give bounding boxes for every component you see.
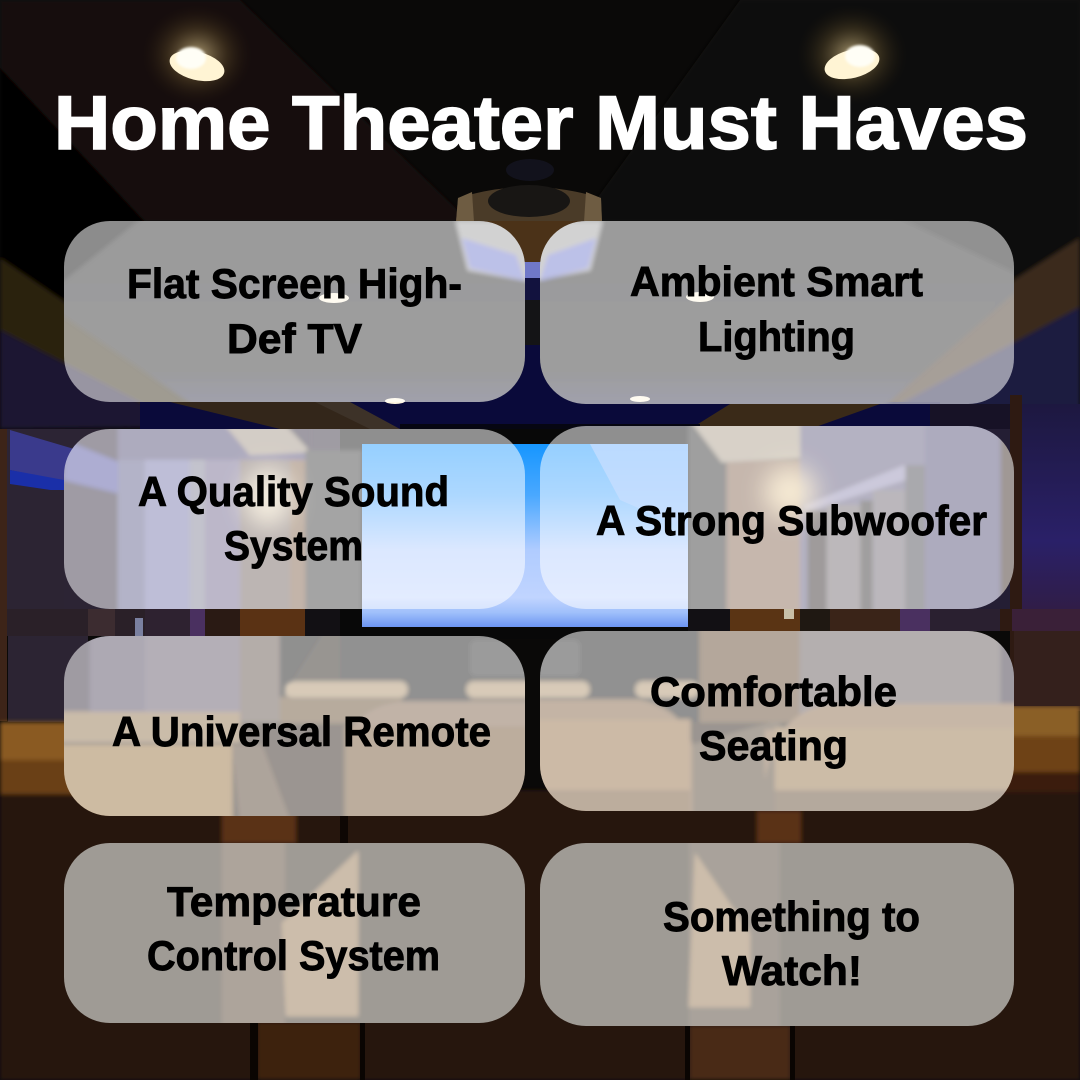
projector lens hood [456,221,602,281]
text: Ambient Smart Lighting [630,258,923,360]
panel: Comfortable Seating [540,631,1014,811]
text: A Quality Sound System: System [224,522,363,569]
text: Ambient Smart Lighting: Lighting [698,313,855,360]
text: Flat Screen High-Def TV: Def TV [227,315,362,362]
aisle edge lines at the bottom [250,811,795,1080]
floor and outer seat tones [0,706,1080,1080]
lower seat base tone [64,722,788,816]
panel: A Quality Sound System [64,429,525,609]
room details visible through the panels [40,215,1030,1030]
aisle behind the bottom panels [221,843,800,1026]
text: Temperature Control System: Temperature [167,878,421,925]
text: Temperature Control System [147,878,440,979]
band between first and second rows [140,402,1014,430]
left outer wall and door [0,429,340,722]
ceiling behind the top panels [40,215,1030,410]
text: Comfortable Seating: Comfortable [650,668,897,715]
back row seats [280,640,698,723]
ceiling wedges outside the panels [0,0,1080,429]
title: Home Theater Must Haves [54,81,1028,166]
right sofa [765,704,1018,815]
text: Flat Screen High-Def TV: Flat Screen High- [127,260,462,307]
text: Ambient Smart Lighting: Ambient Smart [630,258,923,305]
left sofa [64,709,290,816]
panel: Flat Screen High-Def TV [64,221,525,402]
top recessed ceiling lights [142,5,907,105]
wall behind third row [88,631,1014,724]
projection screen behind the panels [362,444,688,627]
text: Something to Watch! [663,893,920,994]
panel: A Strong Subwoofer [540,426,1014,609]
narrow ceiling gap between the top panels [525,300,540,360]
right wall and door [688,420,1018,615]
panel: Something to Watch! [540,843,1014,1026]
text: A Quality Sound System: A Quality Sound [138,468,449,515]
text: A Quality Sound System [138,468,449,569]
projector body above the panels [456,159,602,300]
left wall and doors [60,425,362,615]
text: A Universal Remote: A Universal Remote [112,708,491,755]
panel: Ambient Smart Lighting [540,221,1014,404]
text: Comfortable Seating: Seating [699,722,848,769]
navy ceiling behind lower panel corners [440,345,630,405]
outer walls beside third row [8,631,1080,722]
front wall and outer projection screen [340,429,700,639]
text: Temperature Control System: Control System [147,932,440,979]
lower ceiling lights at the panel edges [385,396,650,404]
text: Something to Watch!: Watch! [722,947,862,994]
band between second and third rows [0,605,1080,638]
panel: A Universal Remote [64,636,525,816]
panel: Temperature Control System [64,843,525,1023]
text: A Strong Subwoofer: A Strong Subwoofer [596,497,987,544]
middle sofas [345,700,780,820]
text: Comfortable Seating [650,668,897,769]
text: Flat Screen High-Def TV [127,260,462,362]
right outer wall [688,395,1080,725]
text: Something to Watch!: Something to [663,893,920,940]
small ceiling lights behind the panels [319,292,714,303]
